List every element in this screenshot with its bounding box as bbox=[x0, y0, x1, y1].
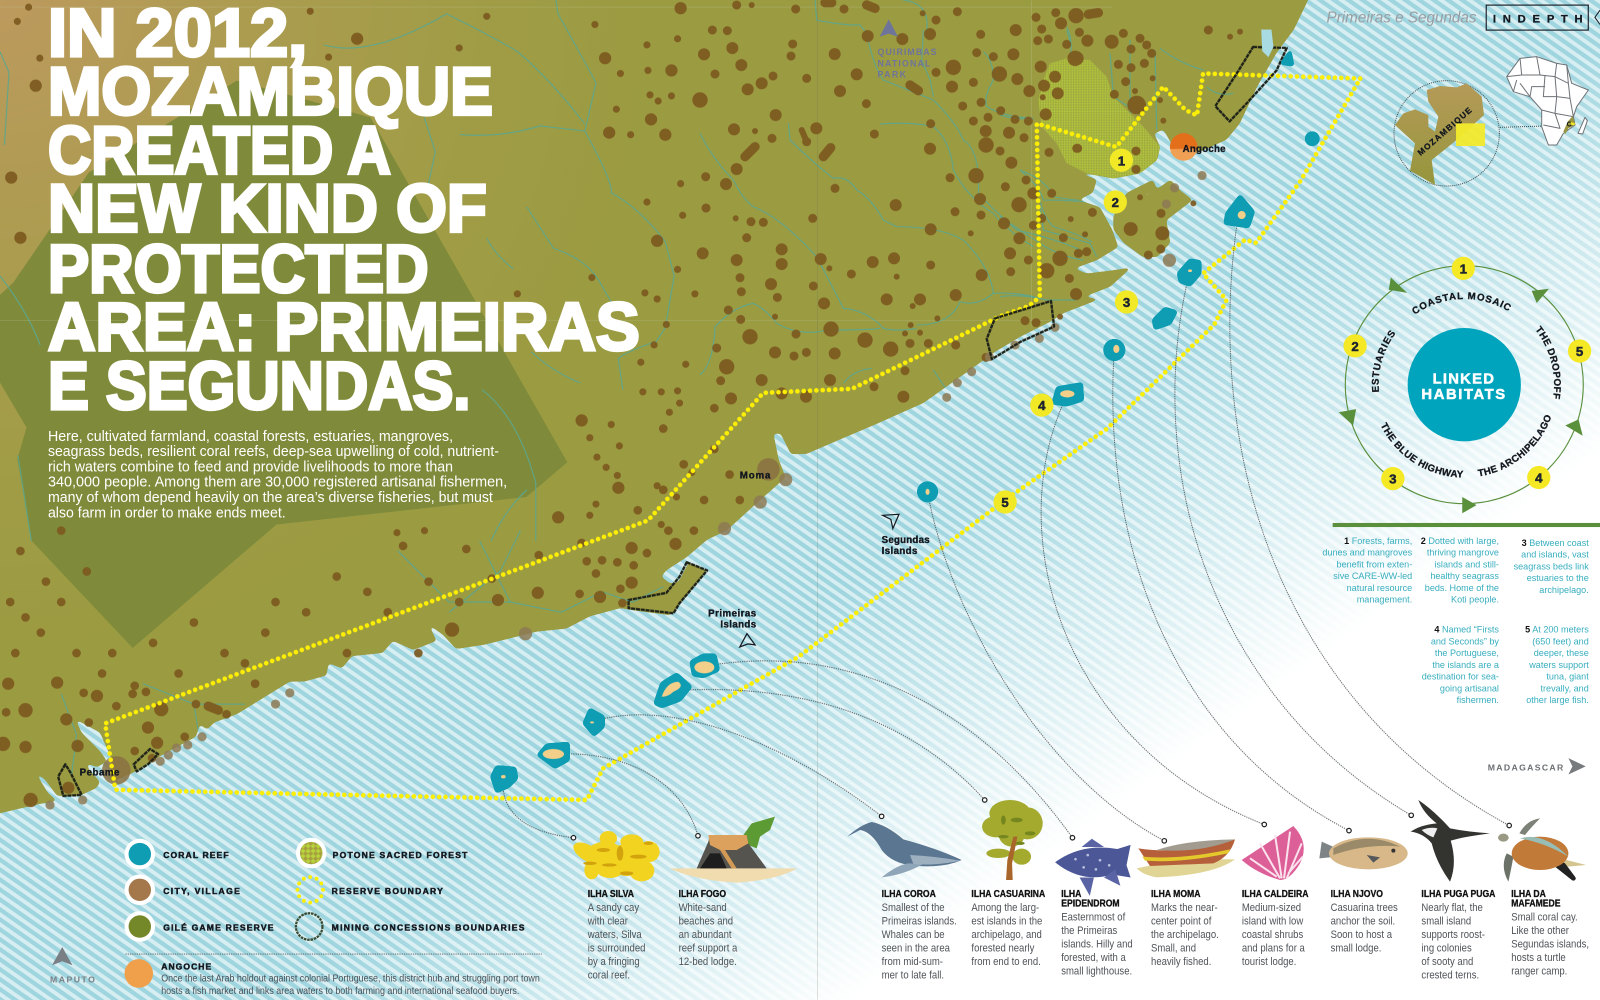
caption: Ilha Epidendrom: forested, with a bbox=[1061, 952, 1126, 964]
caption: Ilha da Mafamede: Segundas islands, bbox=[1511, 939, 1589, 951]
caption: Ilha Moma: Small, and bbox=[1151, 943, 1196, 955]
note 3: archipelago. bbox=[1539, 585, 1589, 595]
map: place labels: Pebame bbox=[80, 768, 120, 779]
habitat notes bbox=[1322, 536, 1589, 705]
note 2: islands and still- bbox=[1434, 559, 1499, 569]
header label: Primeiras e Segundas bbox=[1327, 9, 1477, 26]
note 5: 5 At 200 meters bbox=[1525, 625, 1589, 635]
legend: Potone sacred forest: POTONE SACRED FOREST bbox=[333, 850, 468, 860]
in depth tag: I N D E P T H bbox=[1493, 13, 1583, 25]
map: place labels bbox=[80, 144, 1226, 779]
locator: connector bbox=[1500, 125, 1567, 127]
map: mining concessions bbox=[58, 47, 1287, 796]
diagram: centre label: HABITATS bbox=[1421, 387, 1505, 403]
caption: Ilha Puga Puga: ILHA PUGA PUGA bbox=[1421, 888, 1496, 899]
caption: Ilha Epidendrom: Easternmost of bbox=[1061, 912, 1125, 924]
diagram: number badges: 1 bbox=[1460, 261, 1467, 276]
caption: Ilha Puga Puga: crested terns. bbox=[1421, 970, 1479, 982]
caption: Ilha Njovo: small lodge. bbox=[1331, 943, 1381, 955]
caption: Ilha Casuarina bbox=[971, 888, 1046, 968]
caption: Ilha Fogo: 12-bed lodge. bbox=[679, 957, 737, 968]
caption: Ilha Coroa: seen in the area bbox=[882, 943, 950, 955]
linked habitats diagram bbox=[1338, 256, 1592, 514]
caption: Ilha Moma: center point of bbox=[1151, 916, 1212, 928]
caption: Ilha Caldeira: Medium-sized bbox=[1242, 903, 1301, 914]
locator: Africa bbox=[1507, 57, 1588, 145]
diagram: curved labels: ESTUARIES bbox=[1372, 330, 1395, 392]
illustration: pink coral fan bbox=[1242, 826, 1304, 880]
caption: Ilha Njovo bbox=[1331, 888, 1398, 955]
illustration: seabird bbox=[1411, 800, 1490, 882]
note 1: natural resource bbox=[1347, 583, 1412, 593]
diagram: ring arrows bbox=[1339, 278, 1583, 513]
map: Gile game reserve bbox=[0, 81, 567, 648]
note 5: deeper, these bbox=[1534, 648, 1589, 658]
note 4: going artisanal bbox=[1440, 683, 1499, 693]
diagram: number badges: 3 bbox=[1389, 472, 1397, 487]
caption: Ilha Silva: coral reef. bbox=[588, 970, 630, 982]
note 2: thriving mangrove bbox=[1427, 548, 1499, 558]
caption: Ilha Moma: the archipelago. bbox=[1151, 930, 1219, 941]
caption: Ilha Puga Puga: small island bbox=[1421, 916, 1471, 928]
legend: mining concessions: MINING CONCESSIONS BOUNDARIES bbox=[332, 923, 525, 933]
note 5: (650 feet) and bbox=[1532, 636, 1589, 646]
map: place labels: Islands bbox=[720, 620, 756, 631]
map: land bbox=[0, 0, 1327, 816]
Madagascar pointer: MADAGASCAR bbox=[1488, 762, 1564, 772]
caption: Ilha Coroa: from mid-sum- bbox=[882, 957, 943, 968]
map: place labels: Moma bbox=[740, 471, 771, 482]
legend: Angoche note: ANGOCHE bbox=[161, 961, 212, 971]
note 3: estuaries to the bbox=[1527, 573, 1589, 583]
diagram: curved labels: THE DROPOFF bbox=[1536, 325, 1561, 400]
caption: Ilha Caldeira: ILHA CALDEIRA bbox=[1242, 888, 1309, 899]
caption: Ilha da Mafamede: MAFAMEDE bbox=[1511, 898, 1560, 909]
caption: Ilha Fogo: beaches and bbox=[679, 916, 733, 928]
in depth tag bbox=[1486, 5, 1600, 30]
caption: Ilha Coroa: Smallest of the bbox=[882, 903, 945, 914]
caption: Ilha Puga Puga bbox=[1421, 888, 1496, 982]
intro paragraph: also farm in order to make ends meet. bbox=[48, 505, 286, 521]
caption: Ilha Caldeira: and plans for a bbox=[1242, 943, 1305, 955]
legend: city, village bbox=[124, 874, 240, 905]
locator: Mozambique label: MOZAMBIQUE bbox=[1415, 105, 1474, 158]
illustration: coelacanth bbox=[1055, 839, 1131, 896]
illustration: casuarina tree bbox=[982, 800, 1043, 880]
caption: Ilha Casuarina: archipelago, and bbox=[971, 930, 1042, 941]
diagram: number badges: 5 bbox=[1576, 344, 1583, 359]
map: vertical fold and graticule lines bbox=[0, 0, 1112, 1000]
locator: study area bbox=[1456, 123, 1485, 146]
title: AREA: PRIMEIRAS bbox=[48, 290, 640, 365]
illustration: humpback whale bbox=[847, 822, 962, 877]
legend: Angoche note bbox=[124, 954, 542, 997]
diagram: curved labels: COASTAL MOSAIC bbox=[1412, 292, 1511, 314]
map: numbered badges: 5 bbox=[1001, 495, 1009, 510]
note 3: seagrass beds link bbox=[1514, 561, 1589, 571]
locator: Mozambique shape bbox=[1395, 83, 1484, 185]
diagram: number badges: 2 bbox=[1351, 339, 1359, 354]
intro paragraph: rich waters combine to feed and provide livelihoods to more than bbox=[48, 459, 453, 475]
caption: Ilha Coroa: ILHA COROA bbox=[882, 888, 936, 899]
caption: Ilha da Mafamede bbox=[1511, 888, 1589, 977]
map: settlement dots bbox=[3, 3, 1240, 800]
note 3: and islands, vast bbox=[1521, 550, 1589, 560]
diagram: curved labels bbox=[1372, 292, 1561, 478]
note 1: management. bbox=[1357, 595, 1412, 605]
map: Angoche city marker bbox=[1170, 133, 1197, 161]
caption: Ilha Moma: heavily fished. bbox=[1151, 957, 1211, 968]
legend: Angoche note: Once the last Arab holdout against colonial Portuguese, this district hub and struggling port town bbox=[161, 974, 540, 985]
note 4: the islands are a bbox=[1432, 660, 1500, 670]
title bbox=[48, 0, 640, 424]
map: Quirimbas National Park label bbox=[878, 19, 938, 80]
caption: Ilha Caldeira bbox=[1242, 888, 1309, 968]
caption: Ilha da Mafamede: ILHA DA bbox=[1511, 888, 1546, 899]
map: mangrove peninsula bbox=[1113, 180, 1193, 257]
Madagascar pointer bbox=[1488, 758, 1586, 774]
map: Potone sacred forest bbox=[1038, 58, 1160, 178]
caption: Ilha Silva: A sandy cay bbox=[588, 903, 640, 914]
map: place labels: Islands bbox=[882, 546, 917, 557]
caption: Ilha Moma: Marks the near- bbox=[1151, 903, 1218, 914]
note 2: healthy seagrass bbox=[1430, 571, 1499, 581]
caption: Ilha Fogo: ILHA FOGO bbox=[679, 888, 726, 899]
legend: Potone sacred forest bbox=[296, 838, 468, 868]
caption: Ilha Epidendrom: islands. Hilly and bbox=[1061, 939, 1133, 951]
diagram: number badges: 4 bbox=[1535, 471, 1543, 486]
map: Quirimbas National Park label: QUIRIMBAS bbox=[878, 47, 938, 57]
caption: Ilha Coroa: Primeiras islands. bbox=[882, 916, 957, 928]
legend: Gile game reserve: GILÉ GAME RESERVE bbox=[163, 923, 274, 933]
map: Quirimbas National Park label: NATIONAL bbox=[878, 58, 932, 68]
caption: Ilha Coroa: mer to late fall. bbox=[882, 970, 944, 982]
caption: Ilha Casuarina: from end to end. bbox=[971, 957, 1041, 968]
note 2: Koti people. bbox=[1451, 595, 1499, 605]
caption: Ilha Puga Puga: ing colonies bbox=[1421, 943, 1472, 955]
caption: Ilha Casuarina: Among the larg- bbox=[971, 903, 1039, 914]
caption: Ilha Puga Puga: supports roost- bbox=[1421, 930, 1485, 941]
legend: reserve boundary bbox=[297, 877, 443, 903]
caption: Ilha Casuarina: forested nearly bbox=[971, 943, 1035, 955]
legend: coral reef bbox=[124, 839, 229, 869]
caption: Ilha Coroa bbox=[882, 888, 957, 982]
caption: Ilha Epidendrom: EPIDENDROM bbox=[1061, 898, 1120, 909]
caption: Ilha Puga Puga: of sooty and bbox=[1421, 957, 1473, 968]
caption: Ilha da Mafamede: Small coral cay. bbox=[1511, 912, 1578, 924]
locator map bbox=[1394, 57, 1588, 186]
map: reserve boundary bbox=[105, 73, 1360, 800]
caption: Ilha da Mafamede: hosts a turtle bbox=[1511, 952, 1566, 964]
map: coral reefs bbox=[492, 52, 1320, 792]
illustration: reef fish bbox=[1319, 837, 1408, 869]
note 4: the Portuguese, bbox=[1435, 648, 1499, 658]
caption: Ilha da Mafamede: Like the other bbox=[1511, 925, 1569, 937]
note 3: 3 Between coast bbox=[1522, 538, 1589, 548]
map: numbered badges: 1 bbox=[1118, 153, 1125, 168]
caption: Ilha Fogo: reef support a bbox=[679, 943, 738, 955]
caption: Ilha Casuarina: est islands in the bbox=[971, 916, 1043, 928]
caption: Ilha Caldeira: coastal shrubs bbox=[1242, 930, 1303, 941]
diagram: centre label: LINKED bbox=[1433, 372, 1494, 388]
caption: Ilha Moma: ILHA MOMA bbox=[1151, 888, 1201, 899]
note 2: 2 Dotted with large, bbox=[1421, 536, 1499, 546]
caption: Ilha Silva: waters, Silva bbox=[587, 930, 642, 941]
map: place labels: Angoche bbox=[1183, 144, 1226, 155]
leader end rings bbox=[571, 798, 1511, 843]
map: Moma and Pebame towns bbox=[102, 458, 780, 785]
map: numbered badges: 4 bbox=[1038, 398, 1046, 413]
illustration: beach lodge bbox=[670, 817, 797, 883]
legend: reserve boundary: RESERVE BOUNDARY bbox=[332, 886, 443, 896]
caption: Ilha da Mafamede: ranger camp. bbox=[1511, 966, 1567, 977]
note 1: sive CARE-WW-led bbox=[1333, 571, 1412, 581]
caption: Ilha Coroa: Whales can be bbox=[882, 930, 945, 941]
intro paragraph bbox=[48, 429, 507, 521]
title: E SEGUNDAS. bbox=[48, 349, 470, 424]
note 1: dunes and mangroves bbox=[1322, 548, 1413, 558]
caption: Ilha Fogo: an abundant bbox=[679, 930, 732, 941]
diagram: centre label bbox=[1421, 372, 1505, 403]
diagram: number badges bbox=[1343, 257, 1591, 490]
caption: Ilha Silva: with clear bbox=[587, 916, 629, 928]
Maputo pointer bbox=[50, 947, 95, 985]
caption: Ilha Caldeira: island with low bbox=[1242, 916, 1304, 928]
Maputo pointer: MAPUTO bbox=[50, 975, 95, 985]
caption: Ilha Epidendrom bbox=[1061, 888, 1133, 977]
caption: Ilha Silva: ILHA SILVA bbox=[588, 888, 634, 899]
caption: Ilha Njovo: anchor the soil. bbox=[1331, 916, 1395, 928]
diagram: centre circle bbox=[1408, 328, 1521, 441]
map: numbered badges: 3 bbox=[1123, 295, 1130, 310]
note 5: trevally, and bbox=[1540, 683, 1589, 693]
note 5: other large fish. bbox=[1526, 695, 1589, 705]
caption: Ilha Casuarina: ILHA CASUARINA bbox=[971, 888, 1046, 899]
diagram: ring bbox=[1345, 266, 1583, 504]
legend: coral reef: CORAL REEF bbox=[163, 850, 229, 860]
caption: Ilha Silva: is surrounded bbox=[588, 943, 645, 955]
title: NEW KIND OF bbox=[48, 172, 487, 247]
map: coral islands bbox=[501, 211, 1246, 778]
note 1: 1 Forests, farms, bbox=[1344, 536, 1412, 546]
legend: city, village: CITY, VILLAGE bbox=[163, 886, 240, 896]
legend: mining concessions bbox=[296, 913, 525, 940]
map: place labels: Segundas bbox=[882, 535, 930, 546]
caption: Ilha Njovo: Soon to host a bbox=[1331, 930, 1392, 941]
caption: Ilha Epidendrom: ILHA bbox=[1061, 888, 1082, 899]
title: CREATED A bbox=[48, 113, 391, 188]
caption: Ilha Silva bbox=[587, 888, 645, 982]
legend: Angoche note: hosts a fish market and links area waters to both farming and international seafood buyers. bbox=[161, 986, 519, 997]
title: MOZAMBIQUE bbox=[48, 54, 493, 129]
illustration: fishing boat bbox=[1137, 839, 1235, 877]
intro paragraph: Here, cultivated farmland, coastal forests, estuaries, mangroves, bbox=[48, 429, 453, 445]
map: lagoon bbox=[1261, 30, 1273, 57]
map: rivers bbox=[0, 0, 1233, 776]
caption: Ilha Caldeira: tourist lodge. bbox=[1242, 957, 1296, 968]
caption: Ilha Njovo: ILHA NJOVO bbox=[1331, 888, 1383, 899]
map: leader lines bbox=[503, 212, 1509, 841]
note 4: 4 Named “Firsts bbox=[1434, 625, 1499, 635]
note 2: beds. Home of the bbox=[1425, 583, 1499, 593]
map: coastal mangrove islets bbox=[50, 176, 1202, 805]
diagram: curved labels: THE ARCHIPELAGO bbox=[1477, 415, 1551, 476]
caption: Ilha Fogo bbox=[679, 888, 738, 968]
illustration: yellow coral bbox=[570, 831, 660, 881]
title: PROTECTED bbox=[48, 232, 429, 307]
caption: Ilha Moma bbox=[1151, 888, 1219, 968]
legend bbox=[124, 838, 542, 997]
legend: Gile game reserve bbox=[124, 911, 274, 942]
caption: Ilha Silva: by a fringing bbox=[588, 957, 640, 968]
green divider bar bbox=[1333, 523, 1600, 527]
intro paragraph: 340,000 people. Among them are 30,000 registered artisanal fishermen, bbox=[48, 475, 507, 491]
note 4: and Seconds” by bbox=[1431, 636, 1499, 646]
illustration: sea turtle bbox=[1498, 818, 1586, 882]
intro paragraph: many of whom depend heavily on the area’s diverse fisheries, but must bbox=[48, 490, 493, 506]
map: place labels: Primeiras bbox=[708, 608, 756, 619]
map: Quirimbas National Park label: PARK bbox=[878, 70, 907, 80]
caption: Ilha Epidendrom: the Primeiras bbox=[1061, 925, 1117, 937]
note 5: tuna, giant bbox=[1546, 672, 1589, 682]
map: numbered badges bbox=[993, 149, 1138, 514]
caption: Ilha Puga Puga: Nearly flat, the bbox=[1421, 903, 1483, 914]
note 1: benefit from exten- bbox=[1337, 559, 1412, 569]
note 4: destination for sea- bbox=[1422, 672, 1499, 682]
note 5: waters support bbox=[1528, 660, 1589, 670]
caption: Ilha Njovo: Casuarina trees bbox=[1331, 903, 1398, 914]
caption: Ilha Epidendrom: small lighthouse. bbox=[1061, 966, 1132, 977]
intro paragraph: seagrass beds, resilient coral reefs, deep-sea upwelling of cold, nutrient- bbox=[48, 444, 499, 460]
caption: Ilha Fogo: White-sand bbox=[679, 903, 727, 914]
diagram: curved labels: THE BLUE HIGHWAY bbox=[1381, 422, 1464, 478]
map: numbered badges: 2 bbox=[1112, 195, 1119, 210]
note 4: fishermen. bbox=[1457, 695, 1499, 705]
locator: Mozambique circle bbox=[1394, 81, 1499, 186]
